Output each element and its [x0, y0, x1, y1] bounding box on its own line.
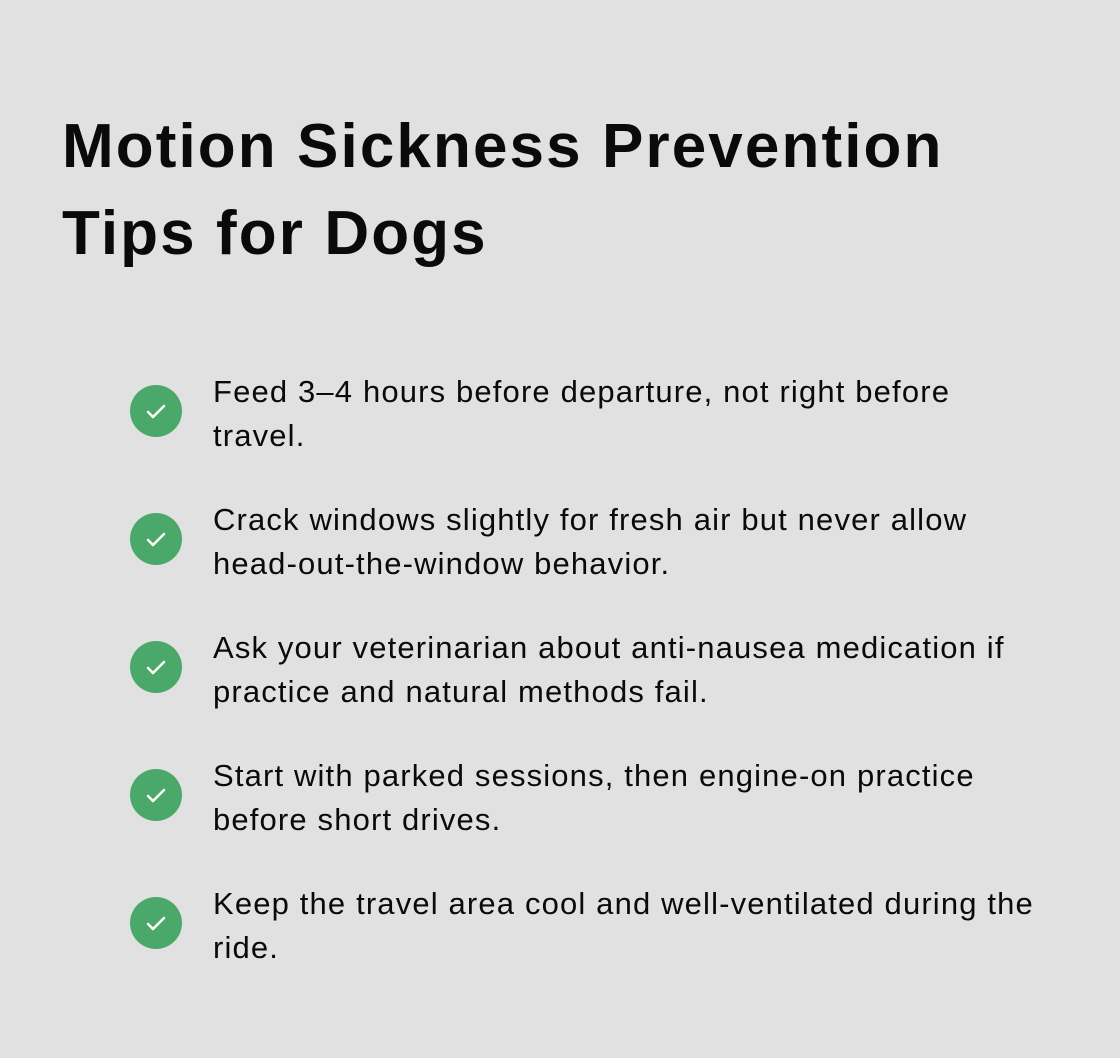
text: Keep the travel area cool and well-ventilated during the [213, 886, 1034, 921]
tip 4 [130, 758, 975, 837]
text: Start with parked sessions, then engine-on practice [213, 758, 975, 793]
icon: check [130, 769, 182, 821]
title: Motion Sickness Prevention [62, 112, 943, 181]
text: ride. [213, 930, 279, 965]
icon: check [130, 385, 182, 437]
text: head-out-the-window behavior. [213, 546, 670, 581]
tip 3 [130, 630, 1005, 709]
text [213, 758, 975, 837]
text: Ask your veterinarian about anti-nausea medication if [213, 630, 1005, 665]
text [213, 886, 1034, 965]
text: before short drives. [213, 802, 501, 837]
text: travel. [213, 418, 305, 453]
icon: check [130, 897, 182, 949]
text [213, 630, 1005, 709]
title: Tips for Dogs [62, 199, 488, 268]
tip 2 [130, 502, 967, 581]
text [213, 374, 950, 453]
text: Feed 3–4 hours before departure, not right before [213, 374, 950, 409]
tip 1 [130, 374, 950, 453]
icon: check [130, 641, 182, 693]
tip 5 [130, 886, 1034, 965]
text: practice and natural methods fail. [213, 674, 709, 709]
text: Crack windows slightly for fresh air but never allow [213, 502, 967, 537]
icon: check [130, 513, 182, 565]
text [213, 502, 967, 581]
title [62, 112, 943, 268]
